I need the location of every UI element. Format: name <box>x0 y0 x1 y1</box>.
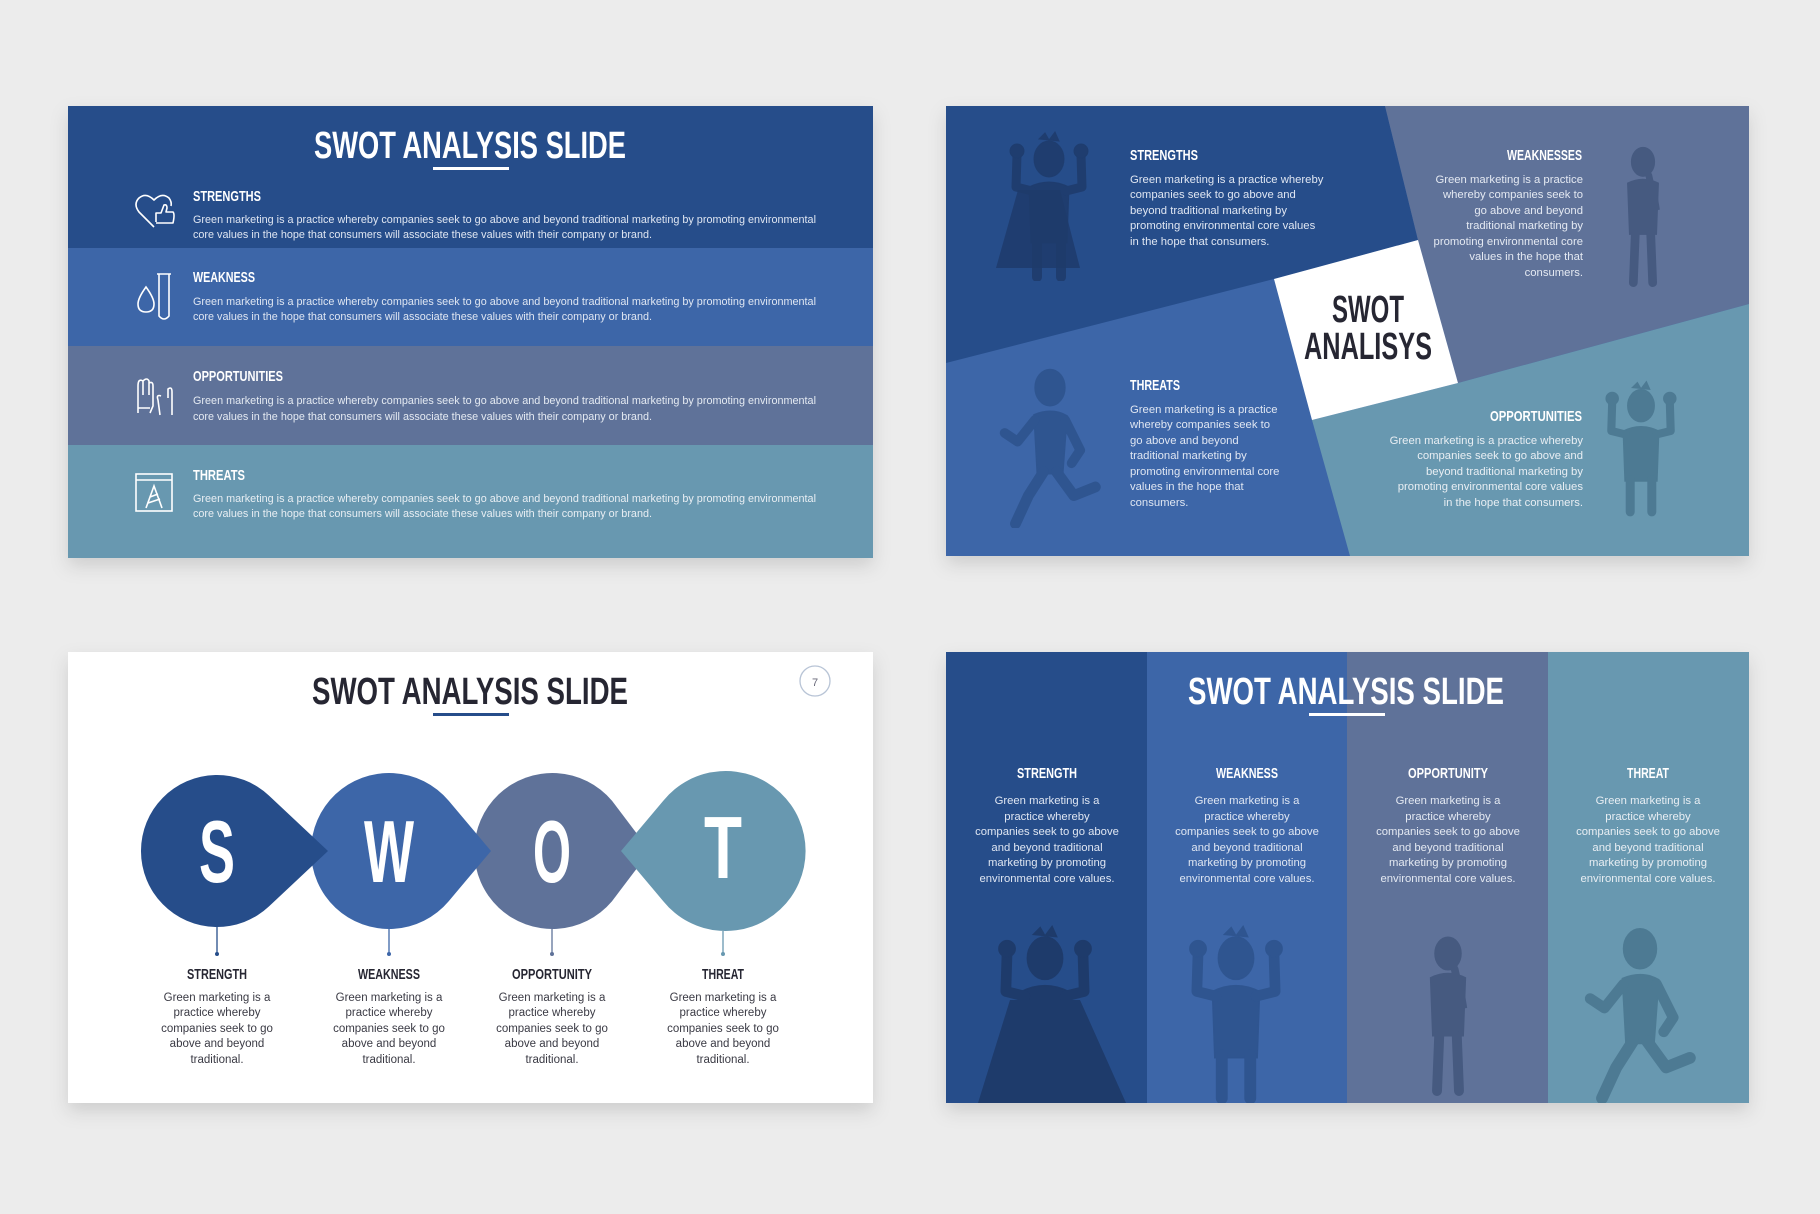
panel: opportunities: beyond traditional marketing by <box>1426 466 1583 478</box>
column: threat: environmental core values. <box>1580 873 1716 885</box>
circles: S W O T: W <box>364 802 414 901</box>
labels and descriptions: STRENGTH <box>187 966 247 983</box>
center label: SWOT ANALISYS <box>1274 240 1458 420</box>
labels and descriptions <box>161 966 779 1066</box>
column: weakness: practice whereby <box>1204 811 1290 823</box>
column: strength: environmental core values. <box>979 873 1115 885</box>
column: weakness: and beyond traditional <box>1191 842 1303 854</box>
column: strength: STRENGTH <box>1017 765 1077 782</box>
panel: weaknesses: consumers. <box>1525 267 1583 279</box>
column: opportunity: practice whereby <box>1405 811 1491 823</box>
labels and descriptions: Green marketing is a <box>499 992 606 1004</box>
column: strength: marketing by promoting <box>988 857 1106 869</box>
column: opportunity <box>1347 652 1548 1103</box>
circles: S W O T: S <box>199 802 235 901</box>
panel: strengths: in the hope that consumers. <box>1130 236 1269 248</box>
labels and descriptions: above and beyond <box>342 1038 436 1050</box>
labels and descriptions: OPPORTUNITY <box>512 966 592 983</box>
panel: opportunities <box>1312 304 1749 556</box>
labels and descriptions: companies seek to go <box>496 1023 608 1035</box>
title <box>312 671 628 716</box>
column: weakness: environmental core values. <box>1179 873 1315 885</box>
panel: strengths: companies seek to go above and <box>1130 189 1296 201</box>
labels and descriptions: above and beyond <box>676 1038 770 1050</box>
column: opportunity: environmental core values. <box>1380 873 1516 885</box>
labels and descriptions: above and beyond <box>505 1038 599 1050</box>
column: threat: Green marketing is a <box>1596 795 1701 807</box>
row: strengths: Green marketing is a practice whereby companies seek to go above and beyond traditional marketing by promoting environmental <box>193 214 816 226</box>
slide 1 title <box>314 125 626 170</box>
slide 1 title: SWOT ANALYSIS SLIDE <box>314 125 626 167</box>
slide 4 title: SWOT ANALYSIS SLIDE <box>1188 671 1504 713</box>
labels and descriptions: WEAKNESS <box>358 966 420 983</box>
panel: weaknesses: whereby companies seek to <box>1442 189 1583 201</box>
connectors <box>215 927 725 956</box>
page number badge: 7 <box>812 677 818 689</box>
labels and descriptions: THREAT <box>702 966 744 983</box>
labels and descriptions: practice whereby <box>509 1007 596 1019</box>
column: threat: marketing by promoting <box>1589 857 1707 869</box>
page number badge <box>800 666 830 696</box>
panel: opportunities: promoting environmental core values <box>1398 481 1583 493</box>
row: threats: Green marketing is a practice whereby companies seek to go above and beyond traditional marketing by promoting environmental <box>193 493 816 505</box>
labels and descriptions: Green marketing is a <box>164 992 271 1004</box>
column: threat <box>1548 652 1749 1103</box>
row: threats <box>136 467 816 520</box>
labels and descriptions: companies seek to go <box>161 1023 273 1035</box>
title: SWOT ANALYSIS SLIDE <box>312 671 628 713</box>
column: weakness: WEAKNESS <box>1216 765 1278 782</box>
slide 1: SWOT list <box>68 106 873 558</box>
column: opportunity: OPPORTUNITY <box>1408 765 1488 782</box>
row: strengths: STRENGTHS <box>193 188 261 205</box>
slide 2: SWOT quadrants <box>946 106 1749 556</box>
panel: weaknesses: WEAKNESSES <box>1507 147 1582 164</box>
labels and descriptions: Green marketing is a <box>336 992 443 1004</box>
panel: weaknesses: values in the hope that <box>1469 251 1584 263</box>
icon: raised hands <box>138 379 172 415</box>
panel: threats: values in the hope that <box>1130 481 1245 493</box>
panel: weaknesses: go above and beyond <box>1474 205 1583 217</box>
column: threat: and beyond traditional <box>1592 842 1704 854</box>
labels and descriptions: practice whereby <box>174 1007 261 1019</box>
column: threat: companies seek to go above <box>1576 826 1720 838</box>
panel: threats: Green marketing is a practice <box>1130 404 1278 416</box>
panel: weaknesses: traditional marketing by <box>1466 220 1583 232</box>
row: weakness: core values in the hope that consumers will associate these values with their company or brand. <box>193 311 652 323</box>
panel: strengths <box>946 106 1418 363</box>
column: strength: Green marketing is a <box>995 795 1100 807</box>
panel: strengths: STRENGTHS <box>1130 147 1198 164</box>
column: opportunity: marketing by promoting <box>1389 857 1507 869</box>
row: weakness <box>138 269 816 323</box>
column: opportunity: and beyond traditional <box>1392 842 1504 854</box>
icon: heart thumbs up <box>136 195 174 227</box>
column: threat: THREAT <box>1627 765 1669 782</box>
row: opportunities: Green marketing is a practice whereby companies seek to go above and beyond traditional marketing by promoting environmental <box>193 395 816 407</box>
labels and descriptions: traditional. <box>696 1054 750 1066</box>
labels and descriptions: companies seek to go <box>667 1023 779 1035</box>
slide 4 title <box>1188 671 1504 716</box>
column: weakness: Green marketing is a <box>1195 795 1300 807</box>
panel: opportunities: Green marketing is a practice whereby <box>1390 435 1583 447</box>
panel: strengths: beyond traditional marketing by <box>1130 205 1287 217</box>
labels and descriptions: above and beyond <box>170 1038 264 1050</box>
row: weakness: Green marketing is a practice whereby companies seek to go above and beyond traditional marketing by promoting environmental <box>193 296 816 308</box>
column: strength <box>946 652 1147 1103</box>
panel: opportunities: OPPORTUNITIES <box>1490 408 1582 425</box>
panel: threats: go above and beyond <box>1130 435 1239 447</box>
column: opportunity: companies seek to go above <box>1376 826 1520 838</box>
circles: S W O T: T <box>704 798 742 897</box>
labels and descriptions: Green marketing is a <box>670 992 777 1004</box>
row: opportunities <box>138 368 816 423</box>
row: strengths <box>136 188 816 241</box>
panel: strengths: promoting environmental core values <box>1130 220 1316 232</box>
panel: opportunities: companies seek to go above and <box>1417 450 1583 462</box>
column: threat: practice whereby <box>1605 811 1691 823</box>
labels and descriptions: traditional. <box>362 1054 416 1066</box>
panel: weaknesses <box>1385 106 1749 383</box>
row: threats: THREATS <box>193 467 245 484</box>
column: weakness: companies seek to go above <box>1175 826 1319 838</box>
panel: weaknesses: Green marketing is a practice <box>1435 174 1583 186</box>
row: weakness: WEAKNESS <box>193 269 255 286</box>
column: weakness <box>1147 652 1347 1103</box>
panel: threats: whereby companies seek to <box>1129 419 1270 431</box>
panel: threats: promoting environmental core <box>1130 466 1279 478</box>
column: strength: practice whereby <box>1004 811 1090 823</box>
labels and descriptions: companies seek to go <box>333 1023 445 1035</box>
labels and descriptions: traditional. <box>525 1054 579 1066</box>
panel: threats: consumers. <box>1130 497 1188 509</box>
panel: threats: traditional marketing by <box>1130 450 1247 462</box>
slide 4: SWOT columns <box>946 652 1749 1103</box>
row: threats: core values in the hope that consumers will associate these values with their company or brand. <box>193 508 652 520</box>
icon: cone window <box>136 474 172 511</box>
row: opportunities: core values in the hope that consumers will associate these values with their company or brand. <box>193 411 652 423</box>
row: strengths: core values in the hope that consumers will associate these values with their company or brand. <box>193 229 652 241</box>
circles: S W O T: O <box>533 802 571 901</box>
panel: threats: THREATS <box>1130 377 1180 394</box>
icon: drop and test tube <box>138 274 171 319</box>
center label: SWOT ANALISYS: ANALISYS <box>1304 326 1432 368</box>
labels and descriptions: practice whereby <box>346 1007 433 1019</box>
circles: S W O T <box>141 771 806 931</box>
panel: threats <box>1005 369 1279 524</box>
panel: opportunities: in the hope that consumers. <box>1444 497 1583 509</box>
column: opportunity: Green marketing is a <box>1396 795 1501 807</box>
panel: weaknesses: promoting environmental core <box>1434 236 1583 248</box>
row: opportunities: OPPORTUNITIES <box>193 368 283 385</box>
labels and descriptions: practice whereby <box>680 1007 767 1019</box>
center label: SWOT ANALISYS: SWOT <box>1332 289 1404 331</box>
panel: strengths: Green marketing is a practice whereby <box>1130 174 1324 186</box>
column: strength: companies seek to go above <box>975 826 1119 838</box>
column: strength: and beyond traditional <box>991 842 1103 854</box>
slide 3: SWOT circles <box>68 652 873 1103</box>
labels and descriptions: traditional. <box>190 1054 244 1066</box>
column: weakness: marketing by promoting <box>1188 857 1306 869</box>
